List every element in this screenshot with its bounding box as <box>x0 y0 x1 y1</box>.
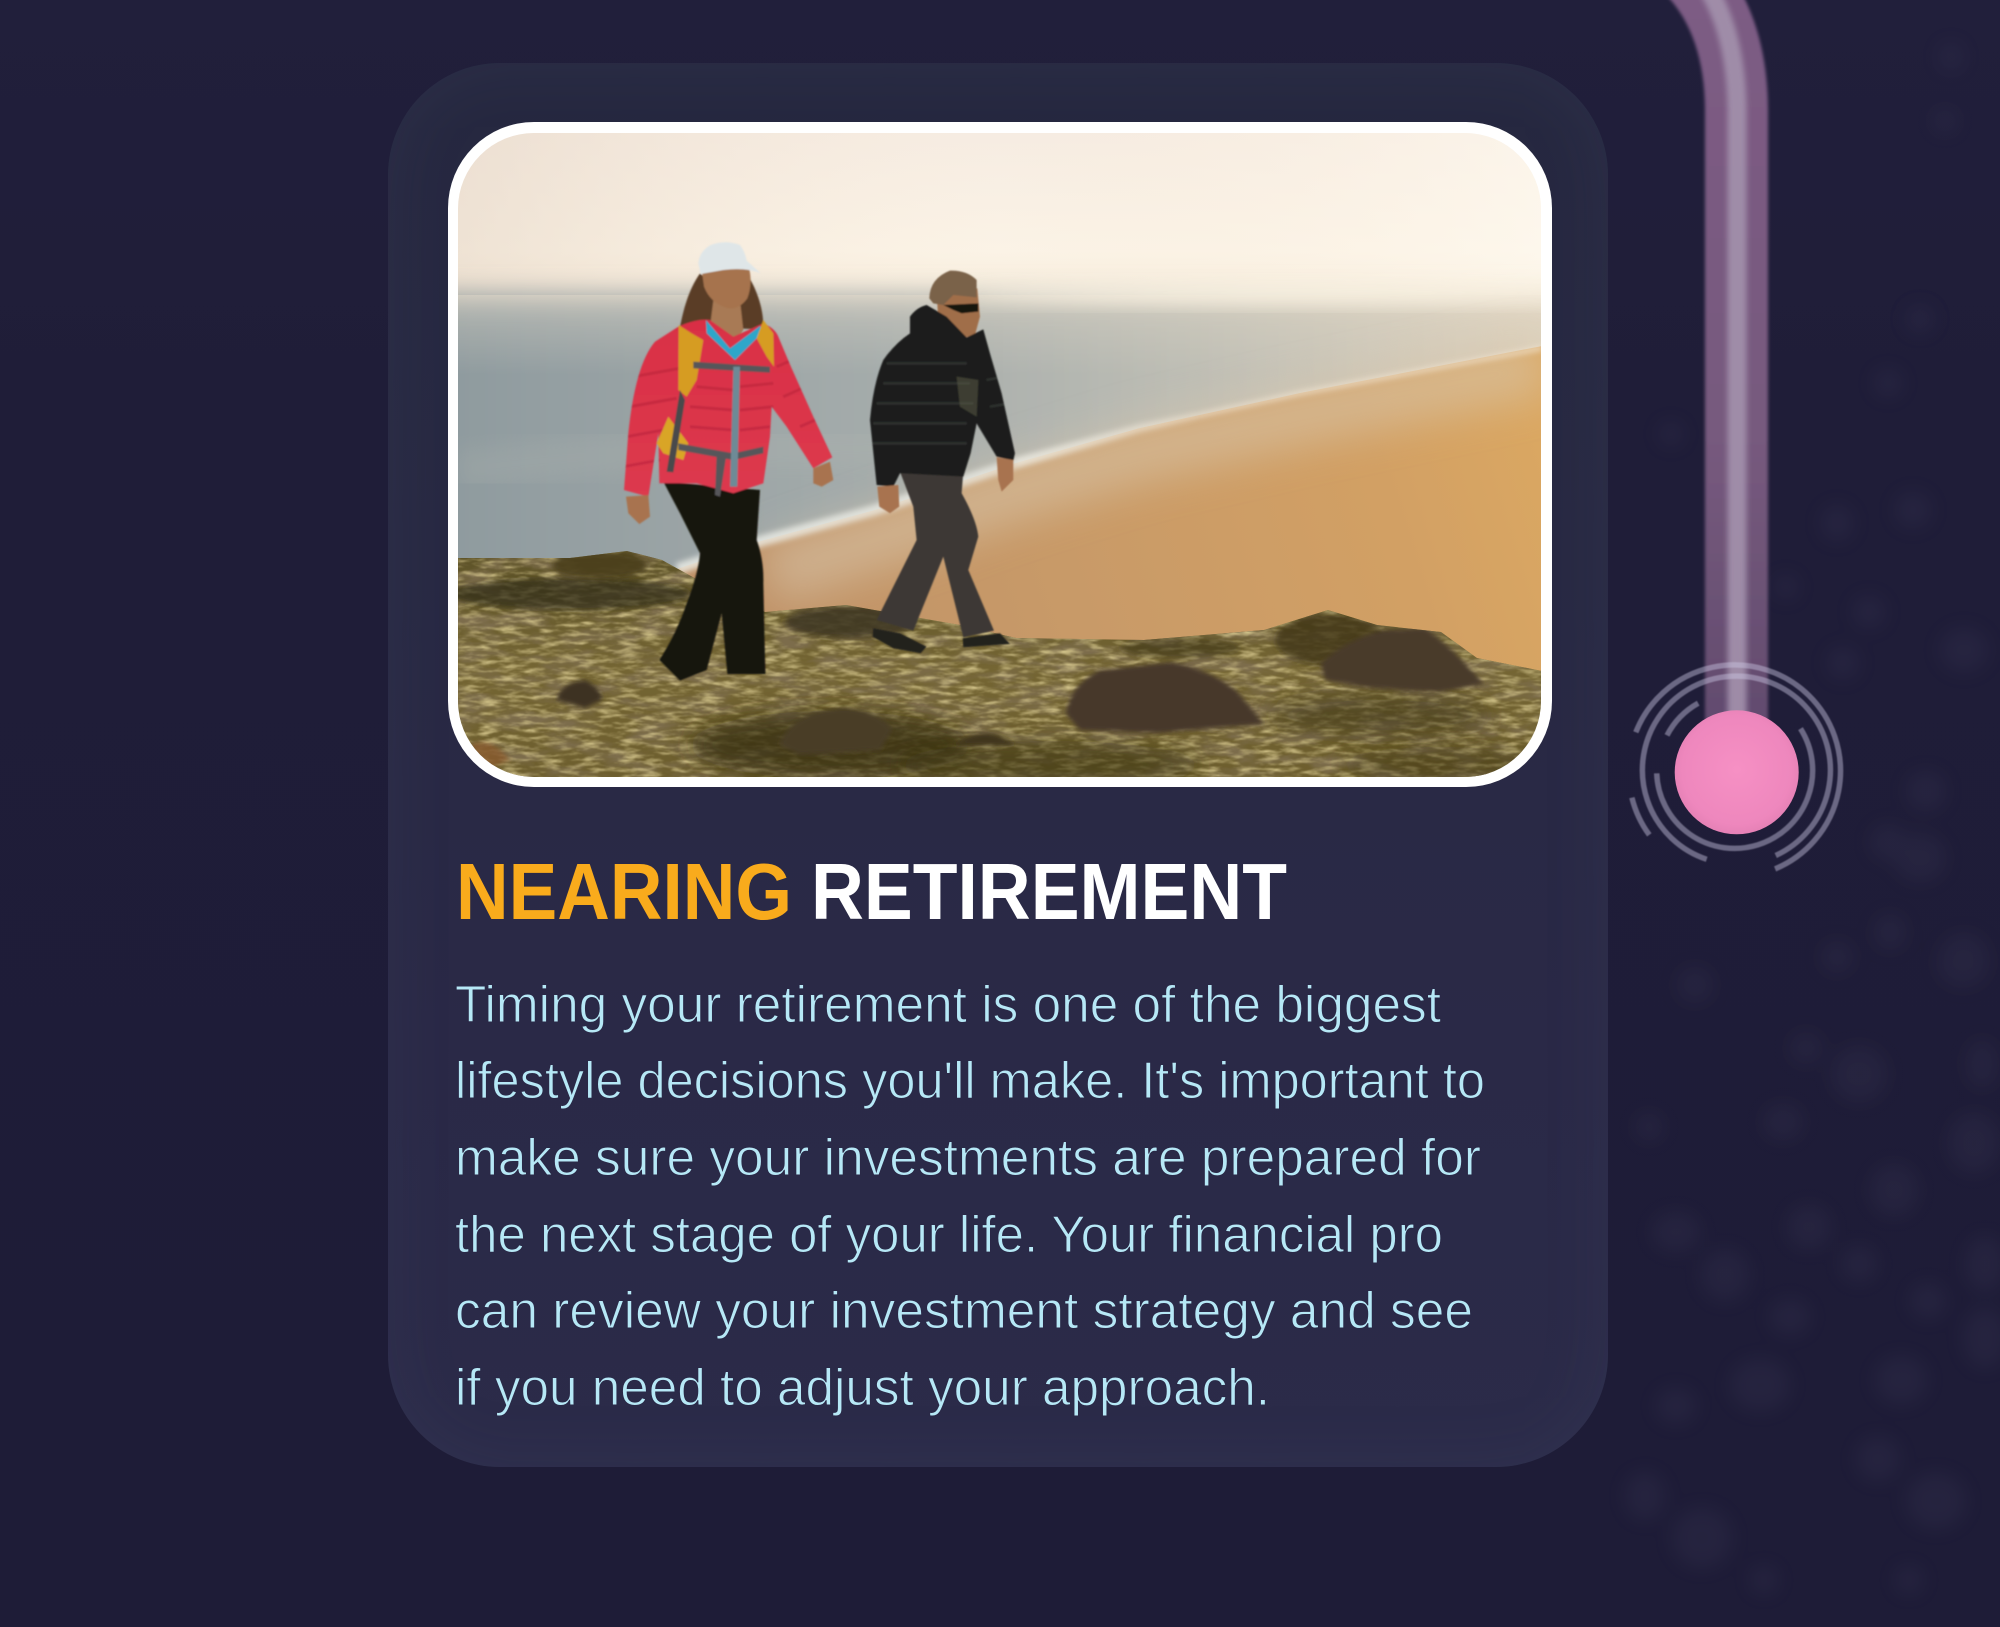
body text: Timing your retirement is one of the biggest <box>455 976 1442 1034</box>
photo frame white border <box>448 122 1552 787</box>
jacket <box>867 303 1017 488</box>
body text: can review your investment strategy and see <box>455 1282 1473 1340</box>
infographic page <box>388 0 1844 1467</box>
hands <box>877 457 1013 513</box>
grassy ground <box>450 540 1542 789</box>
connector tube <box>1686 0 1737 740</box>
neck <box>710 300 744 338</box>
collar <box>706 320 765 360</box>
face <box>937 288 980 340</box>
photo scene <box>458 133 1541 777</box>
heading <box>456 852 1287 932</box>
cap <box>698 242 761 274</box>
panel: nearing retirement card <box>388 63 1608 1467</box>
photo: couple walking above a beach <box>448 122 1552 787</box>
hands <box>626 462 833 524</box>
timeline connector tube and node <box>1629 0 1844 872</box>
pants <box>877 472 994 637</box>
sand <box>678 346 1541 671</box>
backpack straps <box>678 320 774 397</box>
face <box>701 268 752 306</box>
body text <box>455 976 1485 1417</box>
woman walking in red jacket <box>620 242 837 681</box>
signal rings <box>1632 665 1840 869</box>
man walking in black jacket <box>867 271 1017 653</box>
hair <box>929 271 977 305</box>
jacket <box>620 317 837 497</box>
boulders <box>470 628 1484 772</box>
pink node <box>1675 710 1799 834</box>
body text: make sure your investments are prepared for <box>455 1129 1481 1187</box>
hair <box>680 273 763 329</box>
body text: if you need to adjust your approach. <box>455 1359 1270 1417</box>
body text: lifestyle decisions you'll make. It's important to <box>455 1052 1485 1110</box>
sunglasses <box>943 303 978 313</box>
body text: the next stage of your life. Your financial pro <box>455 1206 1443 1264</box>
shoes <box>873 628 1010 653</box>
pants <box>659 482 765 681</box>
